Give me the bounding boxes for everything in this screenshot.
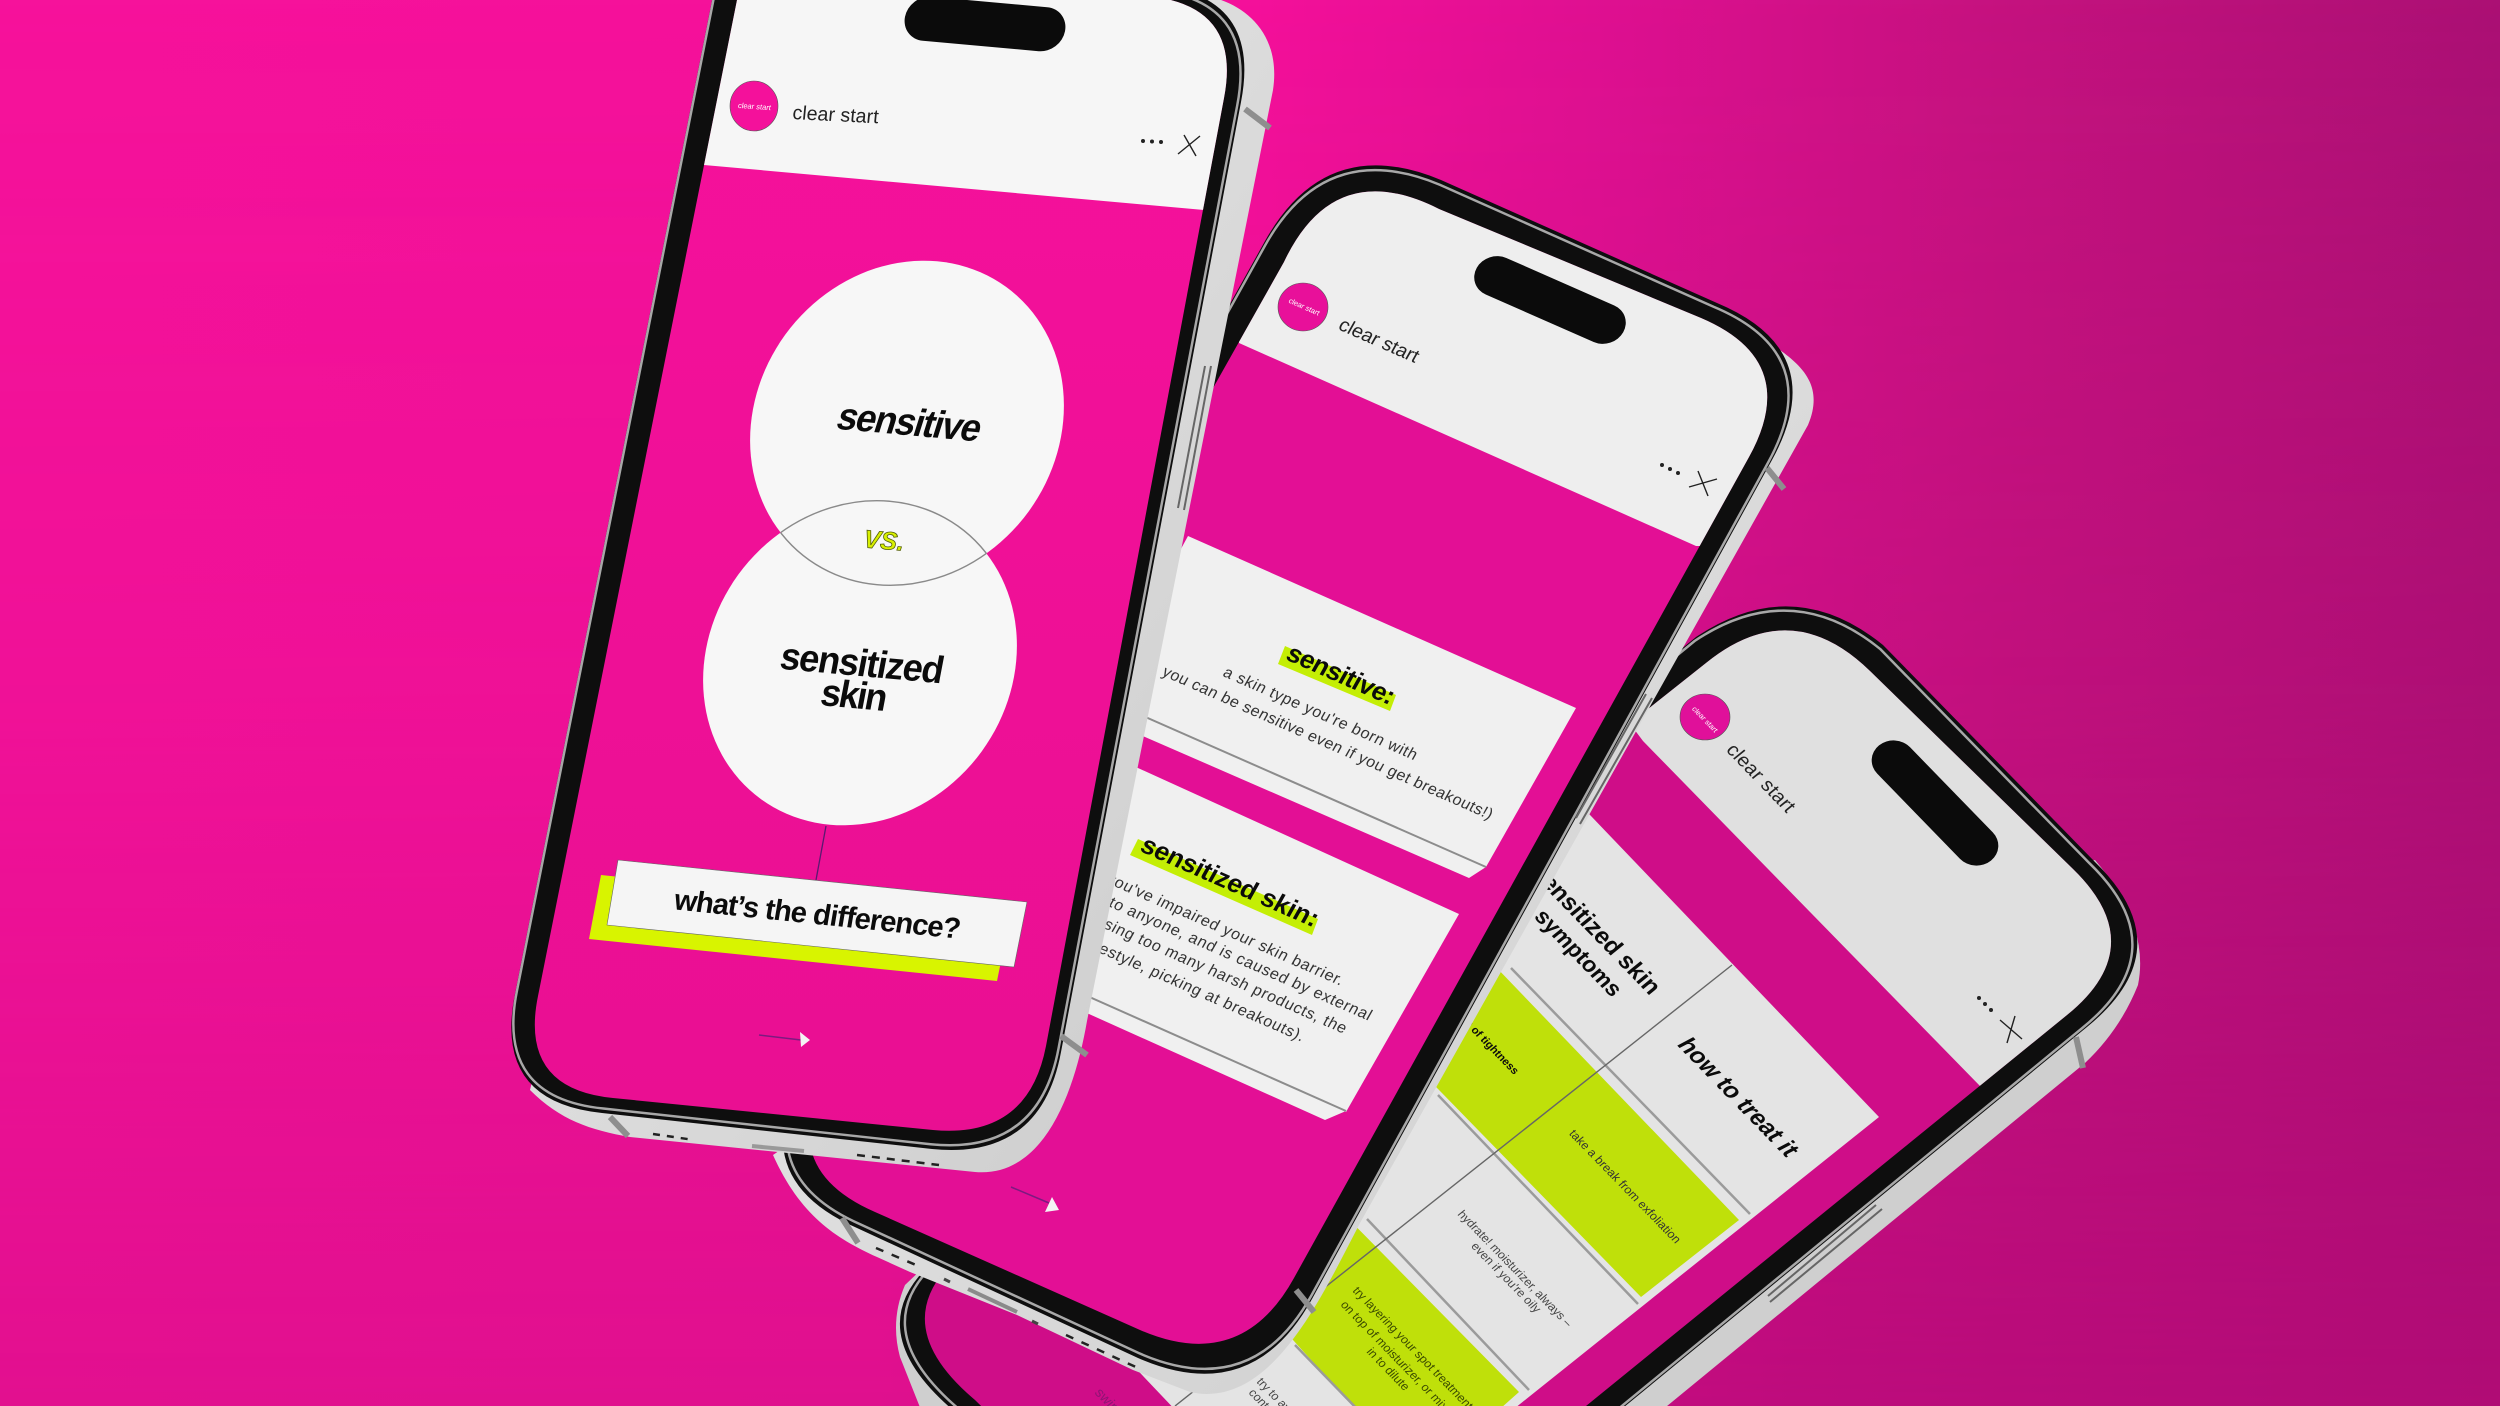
phone 2 pink base (740, 140, 1840, 1406)
card 1 face (1100, 536, 1576, 867)
phone 2 notch (1467, 249, 1633, 351)
term: sensitive: sensitive: (1281, 638, 1401, 710)
phone 1 account name: clear start (792, 102, 880, 128)
phone 2 avatar (1278, 283, 1328, 331)
cell: exfoliation: take a break from exfoliation (1566, 1127, 1684, 1246)
highlight: sensitive (1278, 646, 1396, 711)
phone 1 black bezel (511, 0, 1244, 1150)
cell: spot treatment: in to dilute (1364, 1345, 1413, 1393)
cell: tightness: feeling of tightness (1441, 997, 1521, 1077)
phone 2: definitions (740, 130, 1850, 1406)
vs overlap outline (676, 247, 1091, 839)
column heading: sensitized skin symptoms: sensitized skin (1526, 860, 1666, 1000)
phone 1 screen (500, 0, 1260, 1150)
phone 2 black bezel (783, 165, 1793, 1374)
phone 3 close icon (2000, 1016, 2022, 1043)
phone 3 avatar: clear start (1690, 705, 1721, 735)
phone 3 silver frame (896, 860, 2140, 1406)
card 2 (960, 728, 1459, 1112)
phone 3 dots (1977, 996, 1993, 1012)
banner text: what’s the difference? (671, 883, 963, 946)
circle: sensitive (723, 247, 1091, 599)
phone 3 screen base (924, 630, 2112, 1406)
banner lime shadow (589, 875, 1010, 981)
banner (607, 860, 1027, 967)
phone 3 antenna band (2076, 1037, 2083, 1068)
label: vs.: VS. (862, 525, 906, 557)
phone 3 account name: clear start (1721, 740, 1800, 817)
term: sensitized skin: sensitized skin: (1136, 830, 1325, 933)
phone 1 avatar: clear start (737, 101, 773, 112)
phone 1 silver frame (530, 0, 1274, 1172)
phone 2 arrow (1011, 1187, 1059, 1212)
card 1 rule (1100, 697, 1486, 867)
phone 2 account name: clear start (1335, 314, 1424, 368)
column divider (1175, 965, 1732, 1406)
definition: sensitized skin: using too many harsh products, the (1092, 912, 1350, 1037)
label: sensitive: sensitive (832, 396, 988, 450)
card 2 face (960, 728, 1459, 1112)
phone 1: sensitive vs sensitized (500, 0, 1274, 1172)
lime row 1 (1436, 972, 1739, 1297)
phone 3 avatar (1680, 694, 1730, 740)
phone 2 port and speakers (876, 1248, 1138, 1368)
phone 1 side button (1178, 366, 1211, 510)
phone 2 side button (1576, 694, 1652, 824)
table background (1140, 814, 1879, 1406)
connector line (816, 826, 826, 880)
phone 1 avatar (730, 81, 778, 131)
phone 2 silver frame (773, 350, 1814, 1394)
table rules (1295, 968, 1750, 1406)
label: sensitized skin: skin (817, 671, 892, 719)
circle: sensitized skin (676, 487, 1044, 839)
definition: sensitized skin: you've impaired your skin barrier. (1103, 871, 1347, 989)
card 1 back sheet (1060, 697, 1486, 878)
phone 2 close icon (1689, 471, 1717, 496)
lime row 2 (1292, 1228, 1519, 1406)
phone 1 notch (901, 0, 1069, 53)
cell: hydrate: even if you're oily (1468, 1240, 1544, 1315)
phone 2 avatar: clear start (1287, 296, 1322, 318)
column heading: sensitized skin symptoms: symptoms (1529, 904, 1628, 1001)
phone 1 port and speakers (653, 1134, 939, 1165)
phone 1 pink base (500, 0, 1260, 1150)
definition: sensitive: a skin type you're born with (1220, 664, 1420, 764)
phone 3 black bezel (900, 606, 2137, 1406)
phone 3 side button (1768, 1205, 1882, 1302)
highlight: sensitized skin (1130, 839, 1318, 935)
label: sensitized skin: sensitized (777, 634, 948, 691)
card 1 (1100, 536, 1576, 867)
cell: hydrate: hydrate! moisturizer, always – (1455, 1208, 1576, 1330)
column heading: how to treat it: how to treat it (1672, 1032, 1804, 1163)
definition: sensitive: you can be sensitive even if you get breakouts!) (1159, 664, 1496, 823)
definition: sensitized skin: lifestyle, picking at breakouts). (1083, 935, 1308, 1045)
phone 1 header (704, 0, 1260, 210)
card 2 back sheet (1040, 975, 1346, 1120)
phone 2 header (1239, 130, 1850, 546)
phone 2 dots (1660, 463, 1680, 475)
phone 2 antenna bands (842, 468, 1784, 1312)
definition: sensitized skin: can happen to anyone, and is caused by external (1018, 856, 1375, 1024)
phone 1 arrow (759, 1032, 810, 1047)
phone 3 header (1636, 630, 2112, 1086)
phone 1 antenna bands (610, 109, 1270, 1136)
card 2 rule (1040, 975, 1346, 1111)
cell: cut off row (1249, 1378, 1288, 1406)
phone 3 table (1140, 814, 1879, 1406)
phone 1 close icon (1178, 135, 1200, 156)
phone 1 dots (1141, 139, 1163, 144)
label: sensitized skin (777, 634, 948, 719)
phone 3: symptoms table (896, 606, 2140, 1406)
phone 2 screen (740, 130, 1850, 1406)
phone 3 screen (924, 630, 2112, 1406)
phone 3 notch (1863, 732, 2007, 874)
